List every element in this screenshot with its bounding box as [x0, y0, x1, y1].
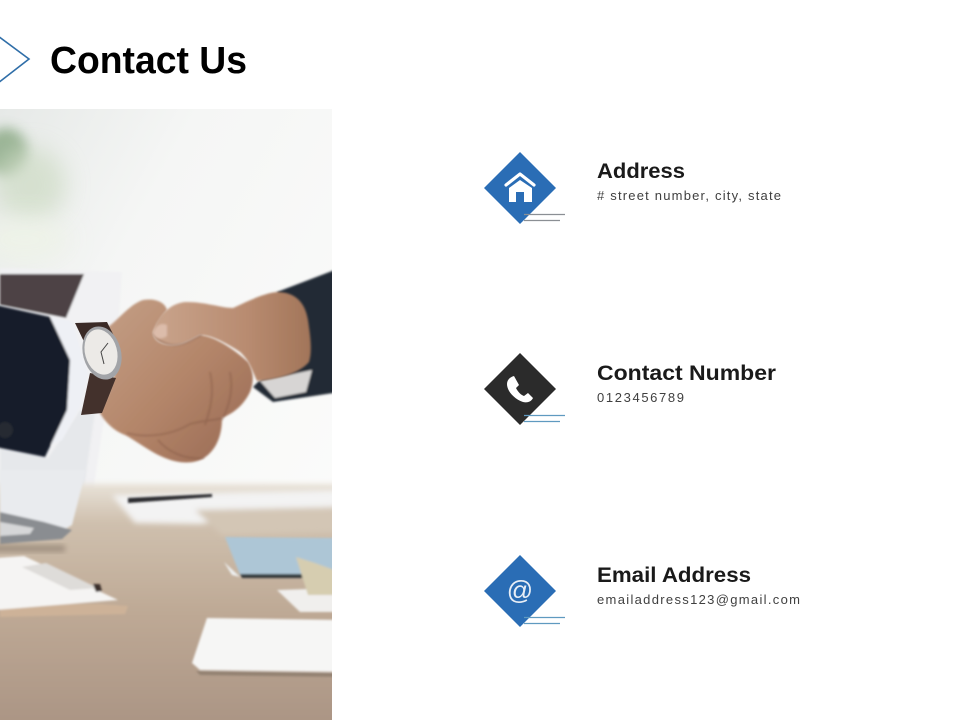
- icon: at sign in blue diamond: @: [507, 575, 533, 605]
- accent lines: [524, 214, 565, 220]
- heading: email address: Email Address: [597, 564, 751, 587]
- accent lines: [524, 416, 565, 422]
- icon: house in blue diamond: [484, 152, 556, 224]
- finger creases: [127, 333, 231, 458]
- table: [0, 484, 352, 720]
- accent lines: [524, 618, 565, 624]
- icon: at sign in blue diamond: [484, 555, 556, 627]
- laptop: [0, 272, 96, 482]
- wristwatch: [75, 322, 122, 415]
- contact item: email address: [484, 555, 800, 627]
- right sleeve: [253, 268, 340, 402]
- text: phone number: 0123456789: [597, 390, 684, 405]
- blurred desk objects: [112, 490, 340, 535]
- laptop base: [0, 482, 82, 545]
- contact item: address: [484, 152, 781, 224]
- contact item: phone number: [484, 353, 776, 425]
- left sleeve with cuff: [0, 304, 72, 458]
- title: Contact Us: [50, 40, 247, 82]
- left hand: [100, 299, 253, 462]
- heading: contact number: Contact Number: [597, 362, 776, 385]
- photo: handshake over a meeting table: [0, 109, 352, 720]
- text: address detail: # street number, city, state: [597, 188, 781, 203]
- title chevron arrow: [0, 36, 29, 83]
- clipboard and papers: [0, 556, 128, 617]
- right hand: [153, 292, 311, 381]
- text: email: emailaddress123@gmail.com: [597, 592, 800, 607]
- heading: address: Address: [597, 160, 685, 183]
- icon: phone in dark diamond: [484, 353, 556, 425]
